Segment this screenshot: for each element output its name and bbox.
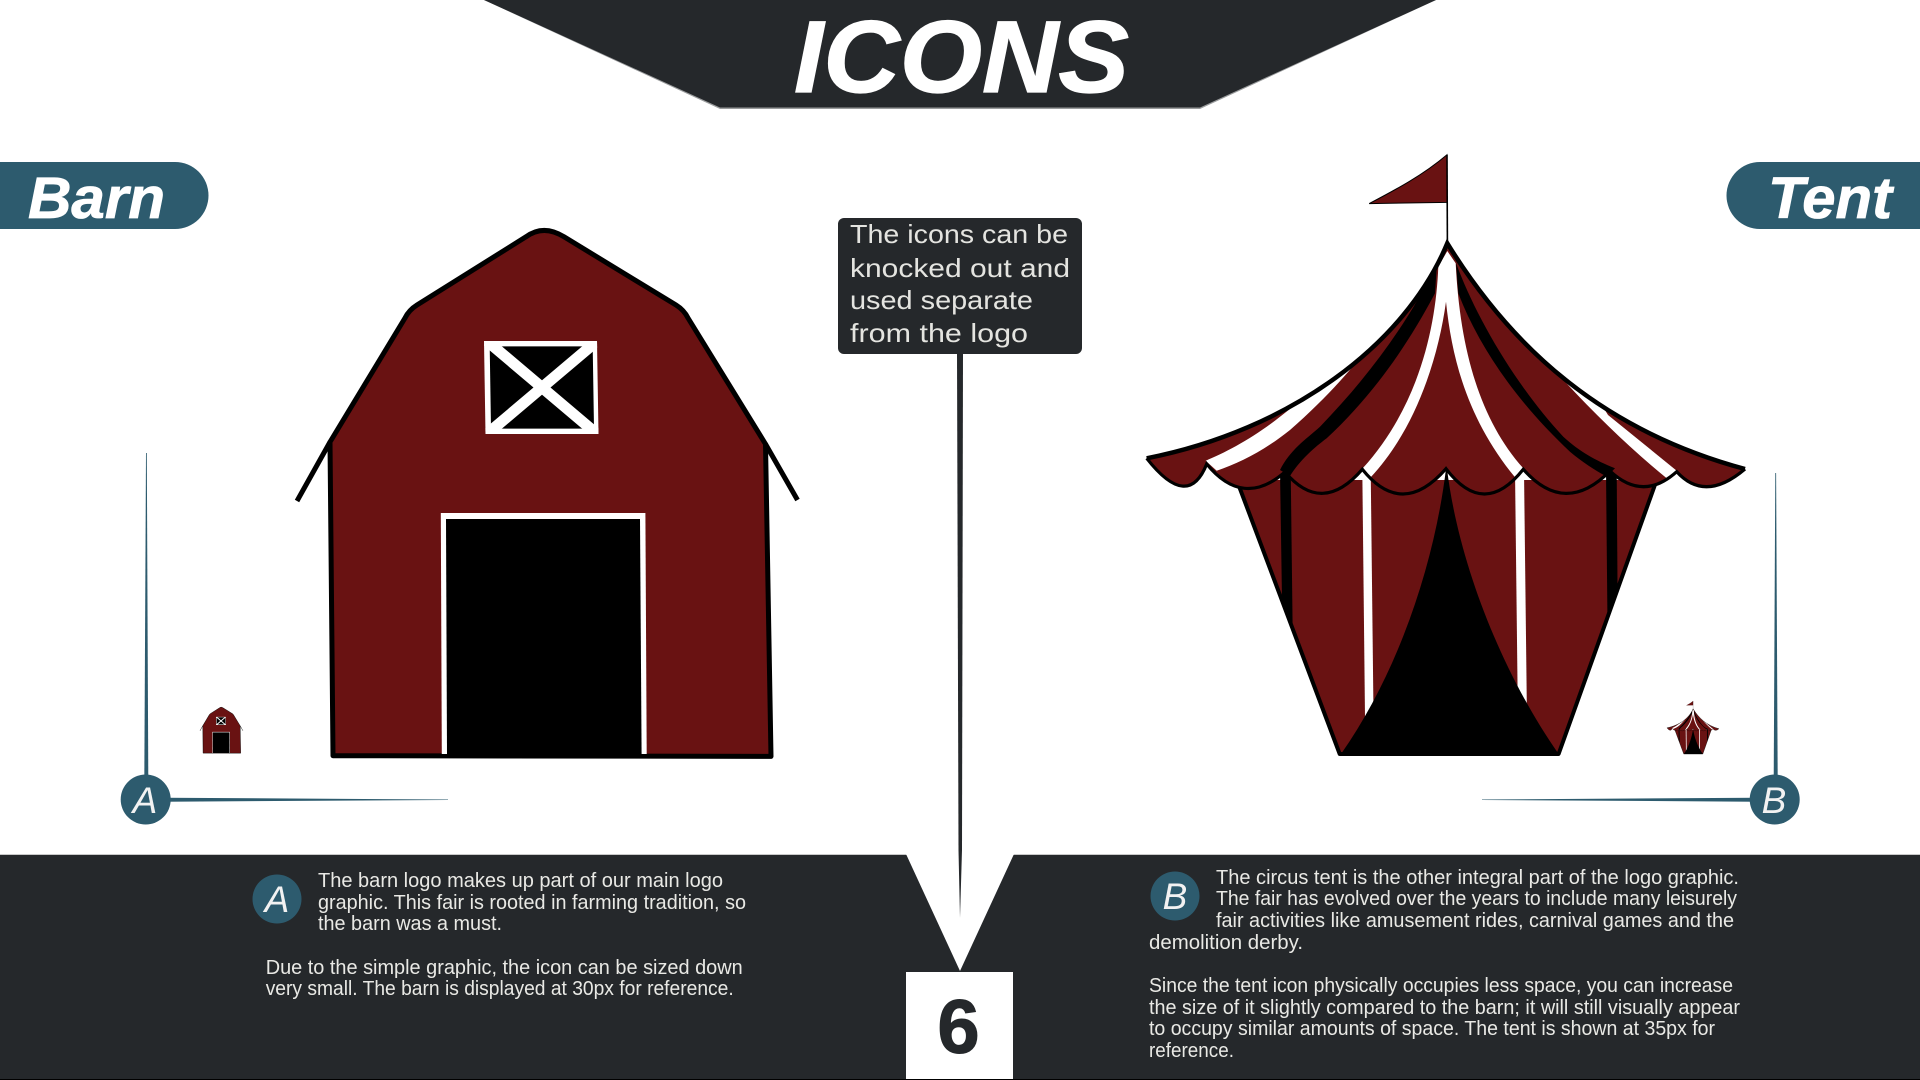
text block: tent description: Since the tent icon physically occupies less space, you can increase bbox=[1149, 974, 1733, 997]
pointer line from callout bbox=[957, 353, 963, 918]
text block: tent description: fair activities like amusement rides, carnival games and the bbox=[1216, 909, 1734, 932]
icon: small barn at 30px bbox=[200, 707, 243, 753]
marker: B with corner lines bbox=[1482, 473, 1800, 824]
title banner bbox=[484, 0, 1436, 114]
icon: circus tent bbox=[1147, 155, 1745, 754]
text block: tent description: B bbox=[1163, 876, 1187, 917]
callout: The icons can be bbox=[850, 219, 1068, 249]
text block: barn description bbox=[252, 869, 746, 1000]
callout: used separate bbox=[850, 285, 1033, 315]
text block: barn description: graphic. This fair is rooted in farming tradition, so bbox=[318, 891, 746, 914]
text block: barn description: The barn logo makes up part of our main logo bbox=[318, 869, 723, 892]
callout bbox=[838, 218, 1082, 354]
marker: A with corner lines bbox=[121, 453, 448, 824]
page number bbox=[906, 972, 1013, 1079]
label: Barn: Barn bbox=[28, 166, 165, 231]
text block: tent description: the size of it slightly compared to the barn; it will still visually appear bbox=[1149, 996, 1740, 1019]
marker: B with corner lines: B bbox=[1762, 780, 1786, 821]
label: Tent bbox=[1726, 162, 1920, 231]
title: ICONS bbox=[794, 0, 1129, 114]
text block: tent description: The circus tent is the other integral part of the logo graphic. bbox=[1216, 866, 1739, 889]
callout: knocked out and bbox=[850, 253, 1070, 283]
text block: barn description: A bbox=[263, 879, 289, 920]
text block: barn description: the barn was a must. bbox=[318, 912, 502, 935]
icon: small tent at 35px bbox=[1667, 701, 1719, 754]
text block: tent description: reference. bbox=[1149, 1039, 1234, 1062]
page number: 6 bbox=[937, 985, 980, 1070]
marker: A with corner lines: A bbox=[131, 780, 157, 821]
text block: barn description: Due to the simple graphic, the icon can be sized down bbox=[266, 956, 743, 979]
bottom dark panel bbox=[0, 854, 1920, 1080]
label: Barn bbox=[0, 162, 208, 231]
icon: barn bbox=[297, 230, 798, 756]
label: Tent: Tent bbox=[1768, 166, 1895, 231]
text block: tent description: to occupy similar amounts of space. The tent is shown at 35px for bbox=[1149, 1017, 1715, 1040]
text block: tent description: The fair has evolved over the years to include many leisurely bbox=[1216, 887, 1738, 910]
text block: barn description: very small. The barn is displayed at 30px for reference. bbox=[266, 977, 734, 1000]
text block: tent description bbox=[1149, 866, 1740, 1062]
callout: from the logo bbox=[850, 318, 1028, 348]
text block: tent description: demolition derby. bbox=[1149, 931, 1303, 954]
